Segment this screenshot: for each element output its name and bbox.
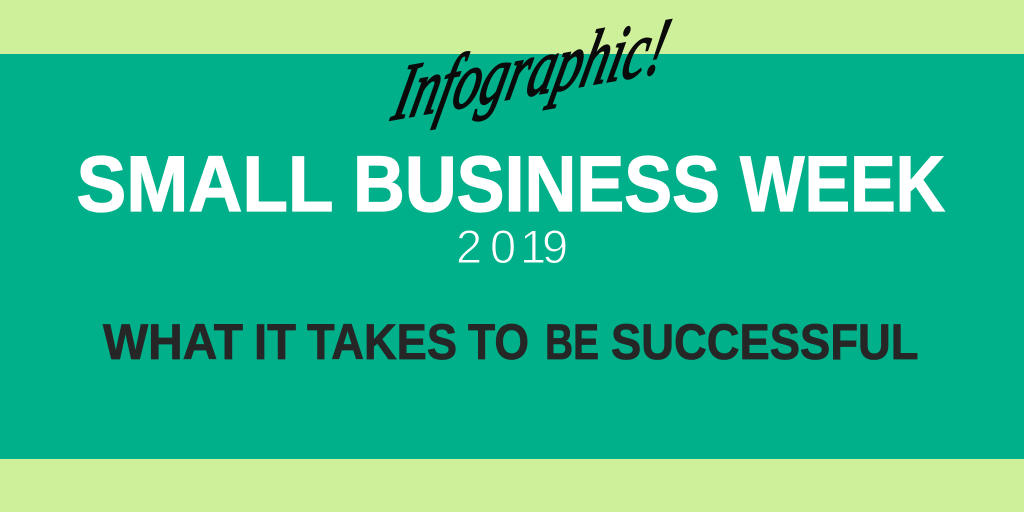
subtitle: WHAT <box>103 314 243 370</box>
bottom light green band <box>0 459 1024 512</box>
top light green band <box>0 0 1024 54</box>
title: BUSINESS <box>353 139 720 228</box>
title: WEEK <box>740 139 945 228</box>
subtitle: SUCCESSFUL <box>611 314 918 370</box>
subtitle <box>103 314 918 370</box>
main green panel <box>0 54 1024 459</box>
subtitle: BE <box>545 314 599 370</box>
title: SMALL <box>76 139 334 228</box>
subtitle: IT <box>254 314 296 370</box>
title <box>76 139 945 228</box>
subtitle: TO <box>468 314 529 370</box>
subtitle: TAKES <box>307 314 457 370</box>
year: 2019 <box>456 220 568 273</box>
